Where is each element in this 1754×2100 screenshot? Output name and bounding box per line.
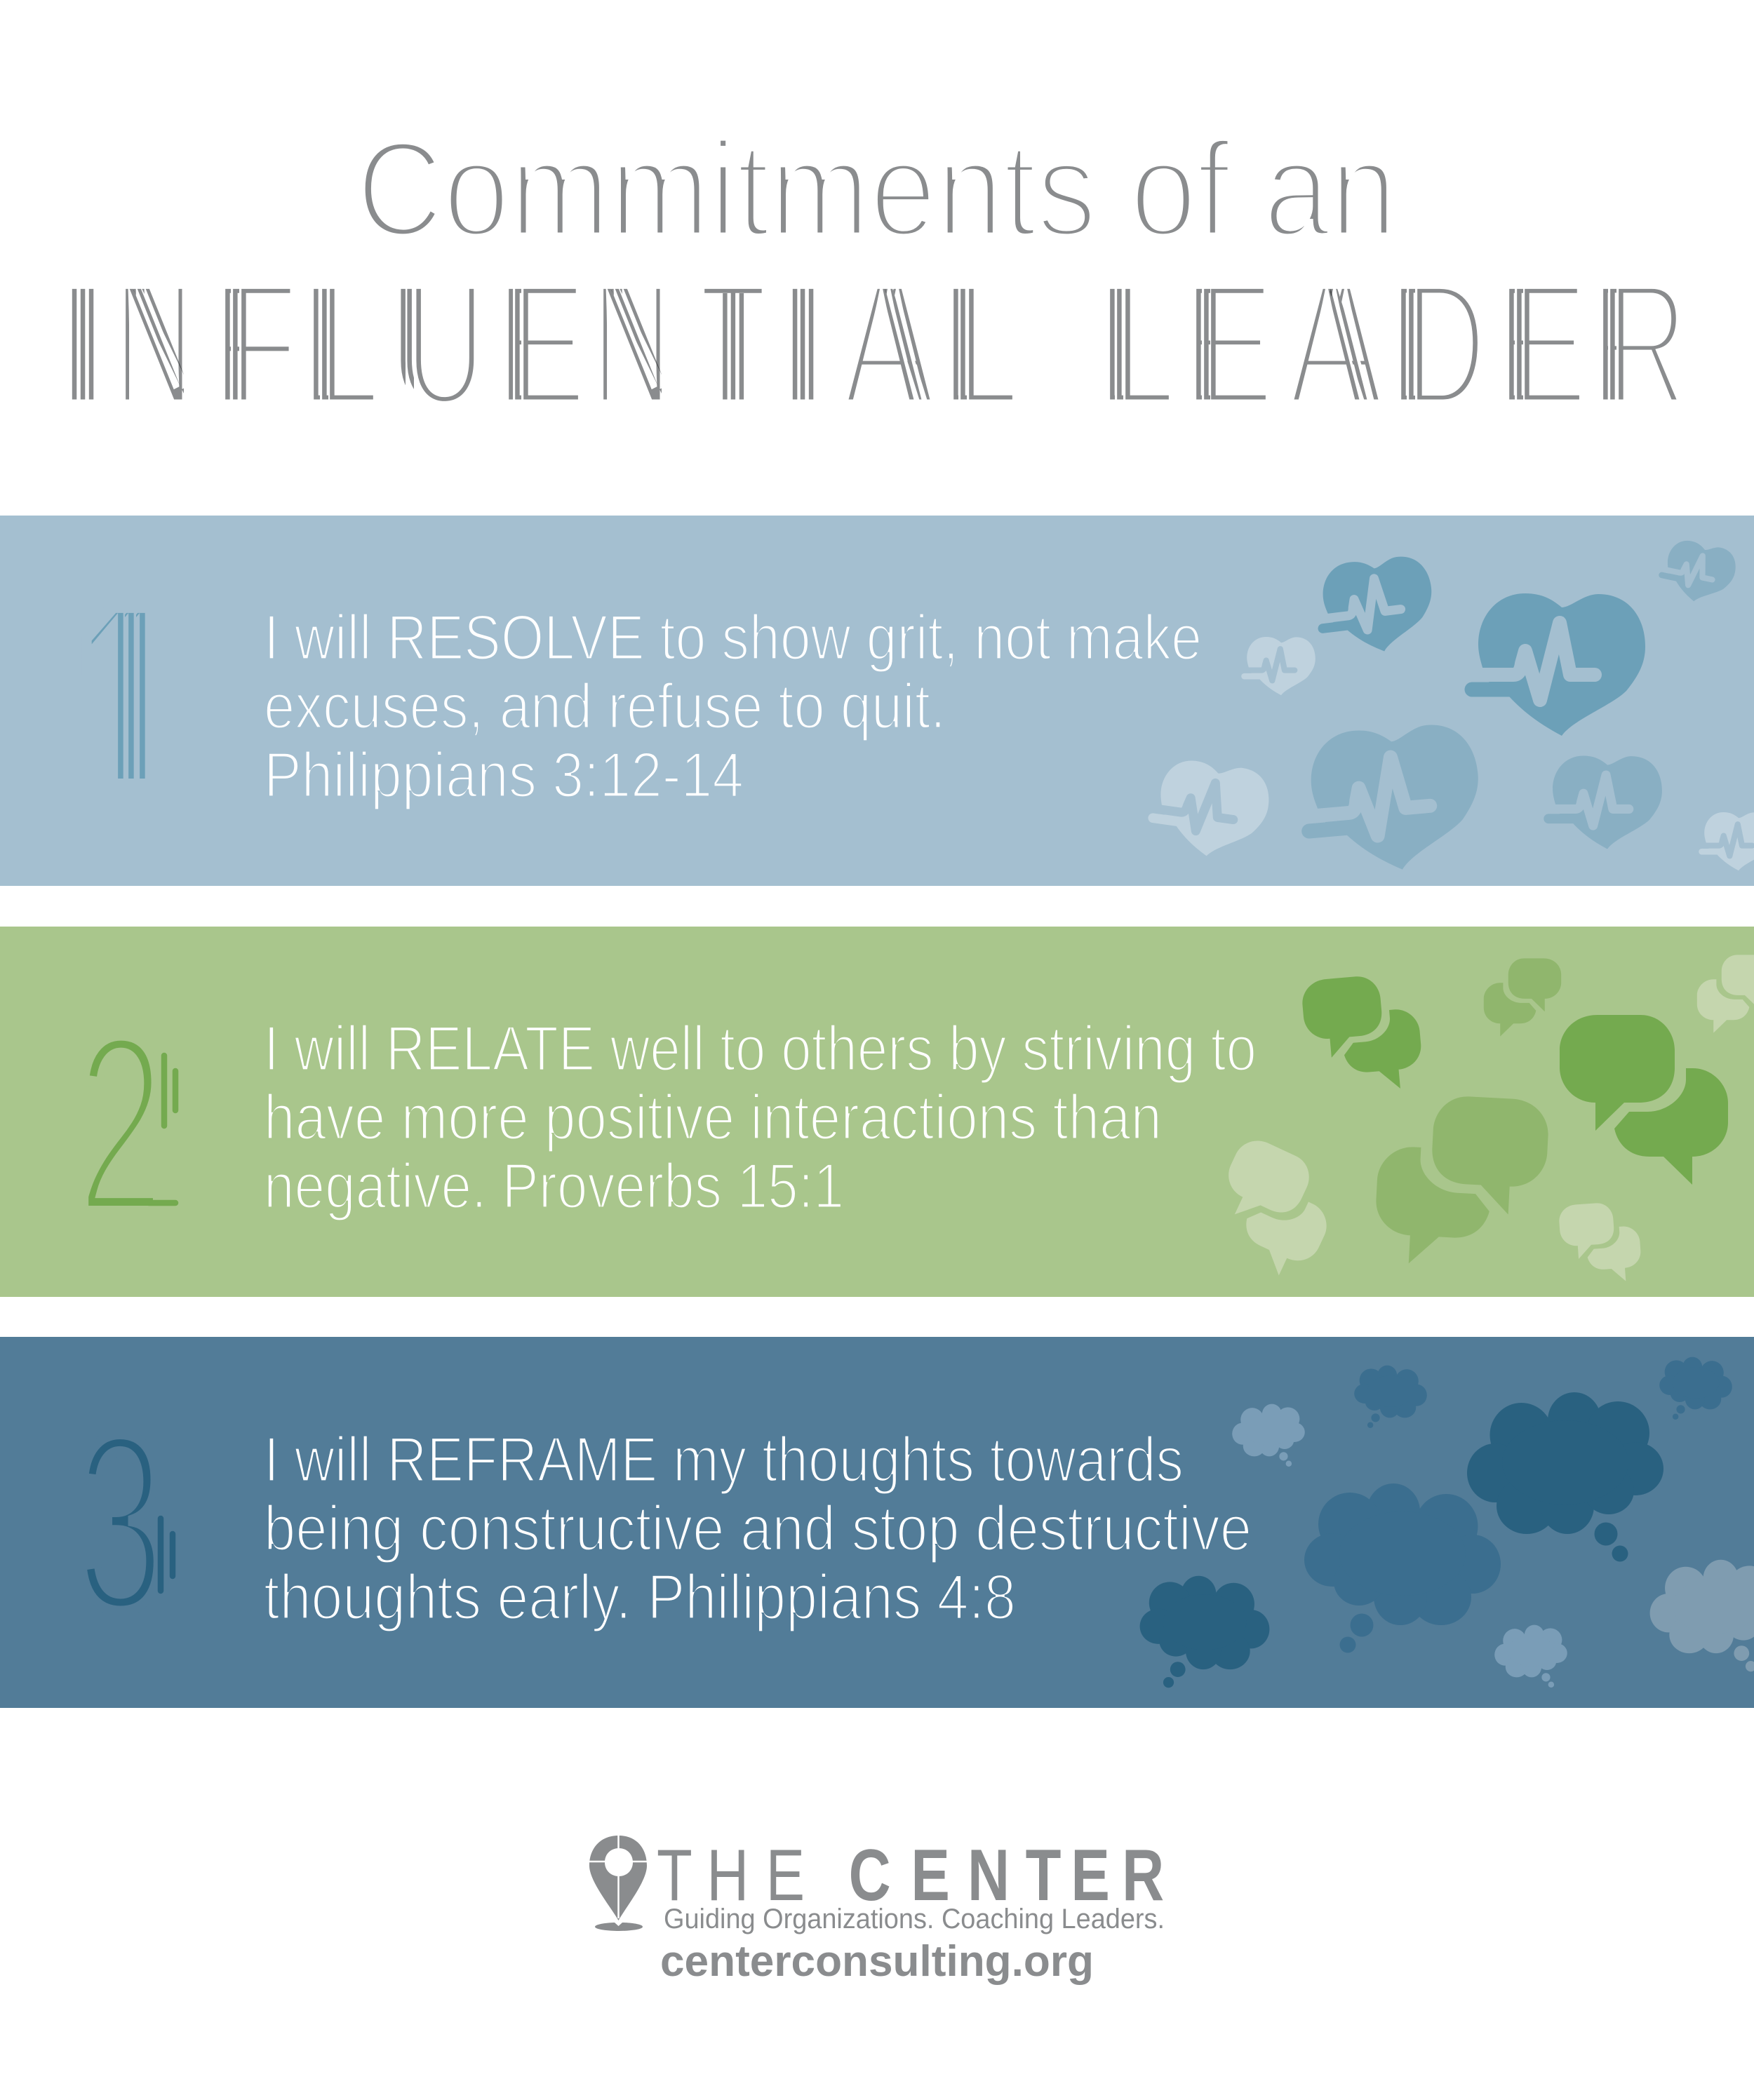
wordmark: CENTER: CENTER [849, 1834, 1164, 1916]
text: relate commitment [264, 1014, 1257, 1222]
tagline: Guiding Organizations. Coaching Leaders. [664, 1904, 1165, 1934]
icons: hearts with pulse lines [1149, 537, 1754, 877]
number 1: 1 [81, 544, 175, 859]
text: relate commitment: I will RELATE well to others by striving to [264, 1014, 1257, 1084]
number 1: 1 [71, 544, 165, 859]
number 3: 3 [77, 1382, 163, 1663]
title line: INFLUENTIAL LEADER: INFLUENTIAL LEADER [76, 248, 1687, 442]
number 1 [91, 613, 145, 779]
text: resolve commitment [264, 603, 1202, 811]
website: centerconsulting.org [660, 1937, 1094, 1986]
icons: speech bubbles [1197, 955, 1754, 1286]
wordmark: THE: THE [657, 1834, 805, 1916]
title line: Commitments of an: Commitments of an [356, 113, 1397, 264]
text: reframe commitment: being constructive and stop destructive [264, 1493, 1252, 1564]
logo: The Center [588, 1834, 1165, 1986]
title line: INFLUENTIAL LEADER: INFLUENTIAL LEADER [59, 248, 1672, 442]
panel: commitment 2 relate [0, 927, 1754, 1297]
panel: commitment 1 resolve [0, 516, 1754, 886]
text: resolve commitment: I will RESOLVE to show grit, not make [264, 603, 1202, 673]
text: relate commitment: negative. Proverbs 15:1 [264, 1151, 844, 1222]
title line: INFLUENTIAL LEADER [72, 289, 1677, 401]
text: reframe commitment: thoughts early. Philippians 4:8 [264, 1562, 1016, 1633]
title line: INFLUENTIAL LEADER: INFLUENTIAL LEADER [67, 248, 1679, 442]
number 1: 1 [93, 544, 187, 859]
icon: map pin [588, 1834, 648, 1931]
text: resolve commitment: excuses, and refuse to quit. [264, 671, 946, 742]
panel: commitment 3 reframe [0, 1337, 1754, 1708]
title [72, 140, 1677, 401]
text: reframe commitment [264, 1425, 1252, 1633]
number 2: 2 [77, 983, 164, 1265]
text: relate commitment: have more positive interactions than [264, 1082, 1162, 1153]
text: reframe commitment: I will REFRAME my thoughts towards [264, 1425, 1184, 1495]
icons: thought clouds [1140, 1357, 1754, 1688]
text: resolve commitment: Philippians 3:12-14 [264, 740, 744, 811]
